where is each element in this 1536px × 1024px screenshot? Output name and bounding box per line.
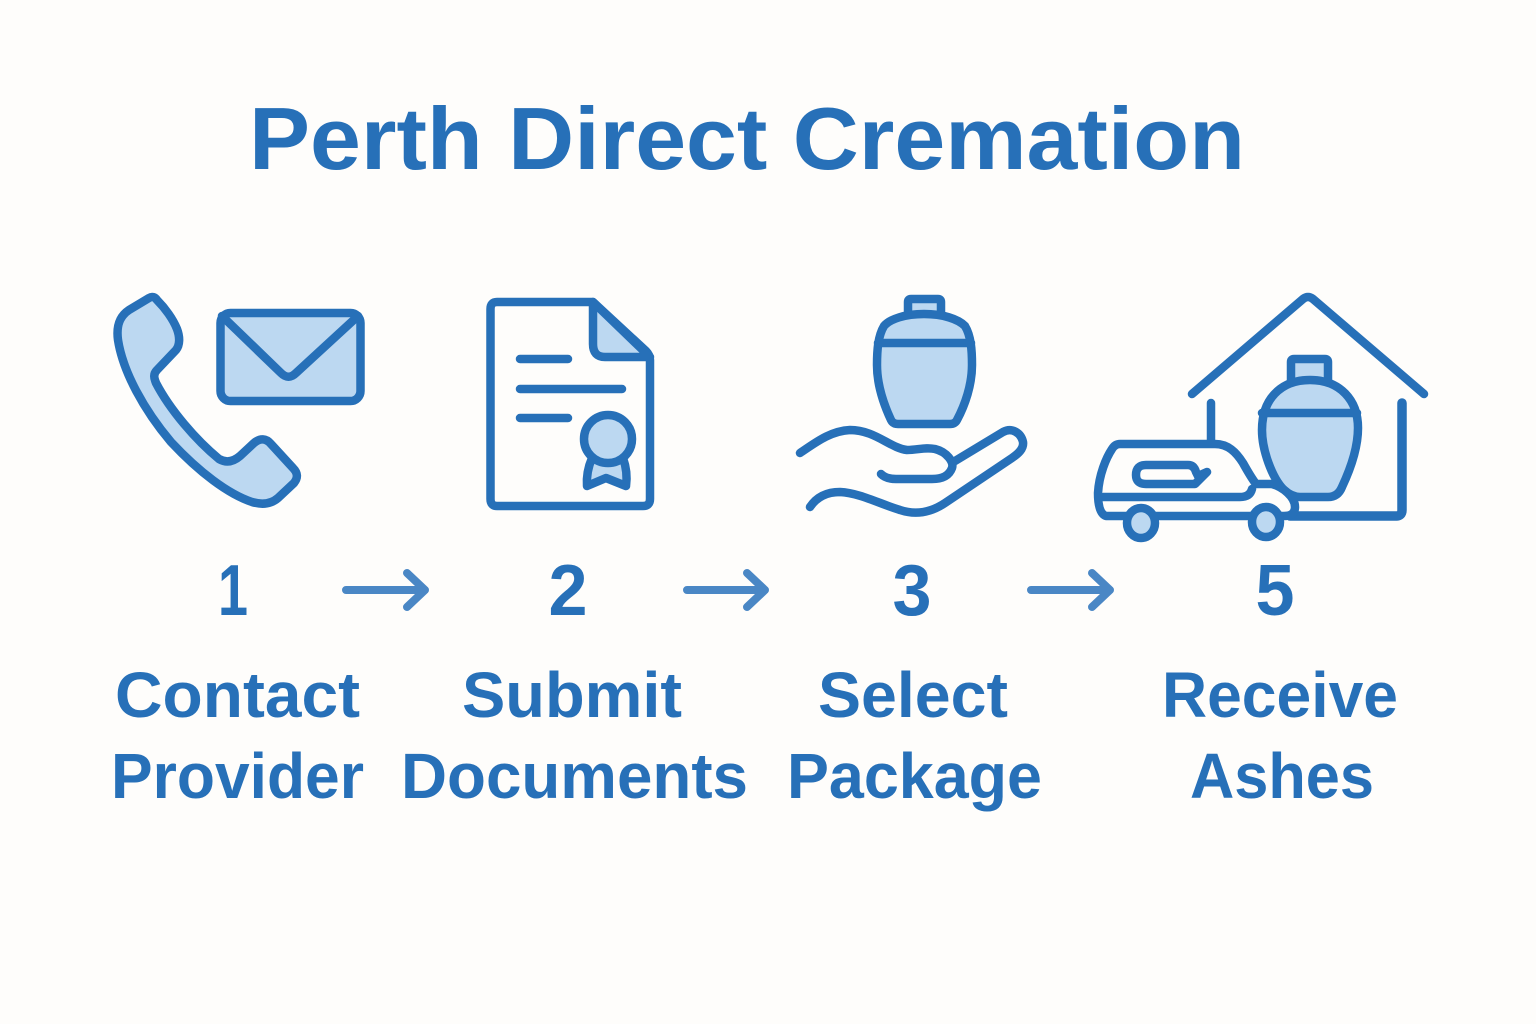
label: Submit Documents: Documents xyxy=(401,740,748,812)
label: Select Package: Select xyxy=(818,659,1008,731)
label: Receive Ashes: Receive xyxy=(1162,659,1398,731)
arrow 2 to 3 xyxy=(687,573,765,607)
icon: telephone handset xyxy=(117,297,297,504)
number 2: 2 xyxy=(548,551,588,631)
label: Submit Documents xyxy=(401,659,748,812)
label: Select Package: Package xyxy=(787,740,1042,812)
title: Perth Direct Cremation xyxy=(249,89,1245,188)
step 3: select package xyxy=(787,299,1042,812)
label: Contact Provider: Provider xyxy=(111,740,364,812)
number 1: 1 xyxy=(218,551,248,631)
arrow 1 to 2 xyxy=(346,573,425,607)
icon: document with seal xyxy=(490,302,650,506)
step 1: contact provider xyxy=(111,297,364,812)
label: Submit Documents: Submit xyxy=(462,659,682,731)
label: Receive Ashes: Ashes xyxy=(1190,740,1374,812)
label: Select Package xyxy=(787,659,1042,812)
arrow 3 to 5 xyxy=(1031,573,1110,607)
label: Contact Provider xyxy=(111,659,364,812)
number 5: 5 xyxy=(1256,551,1294,631)
label: Contact Provider: Contact xyxy=(115,659,360,731)
step 2: submit documents xyxy=(401,302,748,812)
label: Receive Ashes xyxy=(1162,659,1398,812)
number 3: 3 xyxy=(892,551,932,631)
icon: envelope xyxy=(220,313,360,401)
step 5: receive ashes xyxy=(1098,297,1424,812)
icon: urn above open hand xyxy=(800,299,1023,513)
icon: house with urn and hearse xyxy=(1098,297,1424,538)
